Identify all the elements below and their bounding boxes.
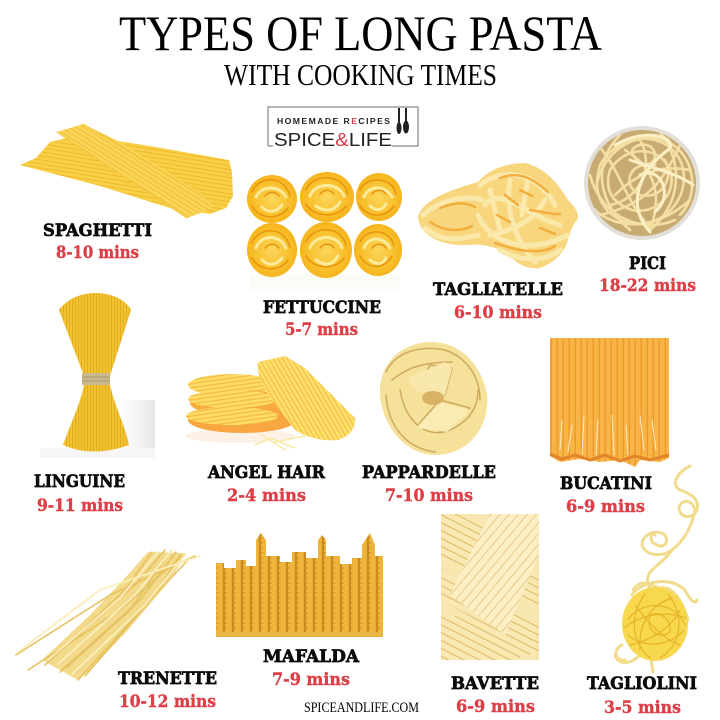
pasta image: bavette — [441, 514, 539, 660]
title: TYPES OF LONG PASTA — [119, 5, 602, 61]
label: angel hair: ANGEL HAIR — [207, 463, 326, 483]
pasta image: mafalda — [216, 533, 383, 637]
label: pici — [599, 254, 696, 296]
label: trenette: TRENETTE — [118, 669, 217, 689]
label: linguine — [34, 472, 125, 516]
pasta image: angel hair nests — [185, 356, 355, 450]
pasta image: bucatini — [550, 338, 669, 467]
pasta image: fettuccine nests — [247, 172, 402, 290]
logo: Spice and Life: SPICE &LIFE — [274, 130, 392, 150]
logo: Spice and Life: HOMEMADE RECIPES — [277, 116, 390, 126]
label: pappardelle — [362, 463, 496, 506]
label: tagliatelle: 6-10 mins — [454, 303, 542, 323]
label: tagliatelle: TAGLIATELLE — [433, 280, 563, 300]
label: mafalda: 7-9 mins — [272, 670, 350, 690]
label: linguine: 9-11 mins — [37, 496, 123, 516]
pasta image: pappardelle nest — [380, 342, 487, 455]
label: bucatini: BUCATINI — [560, 474, 652, 494]
label: angel hair — [207, 463, 326, 506]
label: spaghetti — [43, 221, 152, 263]
label: tagliatelle — [433, 280, 563, 323]
website footer: SPICEANDLIFE.COM — [304, 700, 419, 716]
label: fettuccine: 5-7 mins — [285, 320, 358, 340]
label: mafalda: MAFALDA — [263, 647, 360, 667]
label: bavette — [451, 674, 539, 717]
logo: Spice and Life — [268, 107, 418, 150]
label: trenette — [118, 669, 217, 712]
label: pici: PICI — [629, 254, 666, 274]
pasta image: trenette — [16, 550, 200, 680]
label: spaghetti: SPAGHETTI — [43, 221, 152, 241]
label: tagliolini: 3-5 mins — [604, 698, 681, 718]
label: spaghetti: 8-10 mins — [56, 243, 139, 263]
label: bucatini — [560, 474, 652, 517]
label: angel hair: 2-4 mins — [227, 486, 306, 506]
label: fettuccine: FETTUCCINE — [263, 298, 381, 318]
pasta image: tagliolini — [615, 466, 698, 672]
label: linguine: LINGUINE — [34, 472, 125, 492]
label: bavette: 6-9 mins — [456, 697, 535, 717]
label: bavette: BAVETTE — [451, 674, 539, 694]
label: pappardelle: 7-10 mins — [385, 486, 473, 506]
pasta image: pici in bowl — [584, 126, 700, 240]
label: pici: 18-22 mins — [599, 276, 696, 296]
pasta image: tagliatelle — [418, 163, 578, 268]
label: bucatini: 6-9 mins — [566, 497, 645, 517]
label: tagliolini: TAGLIOLINI — [587, 674, 697, 694]
label: trenette: 10-12 mins — [119, 692, 216, 712]
pasta image: linguine bundle — [40, 293, 155, 458]
label: mafalda — [263, 647, 360, 690]
subtitle: WITH COOKING TIMES — [224, 57, 497, 92]
label: fettuccine — [263, 298, 381, 340]
pasta image: spaghetti — [20, 124, 233, 218]
label: tagliolini — [587, 674, 697, 718]
label: pappardelle: PAPPARDELLE — [362, 463, 496, 483]
